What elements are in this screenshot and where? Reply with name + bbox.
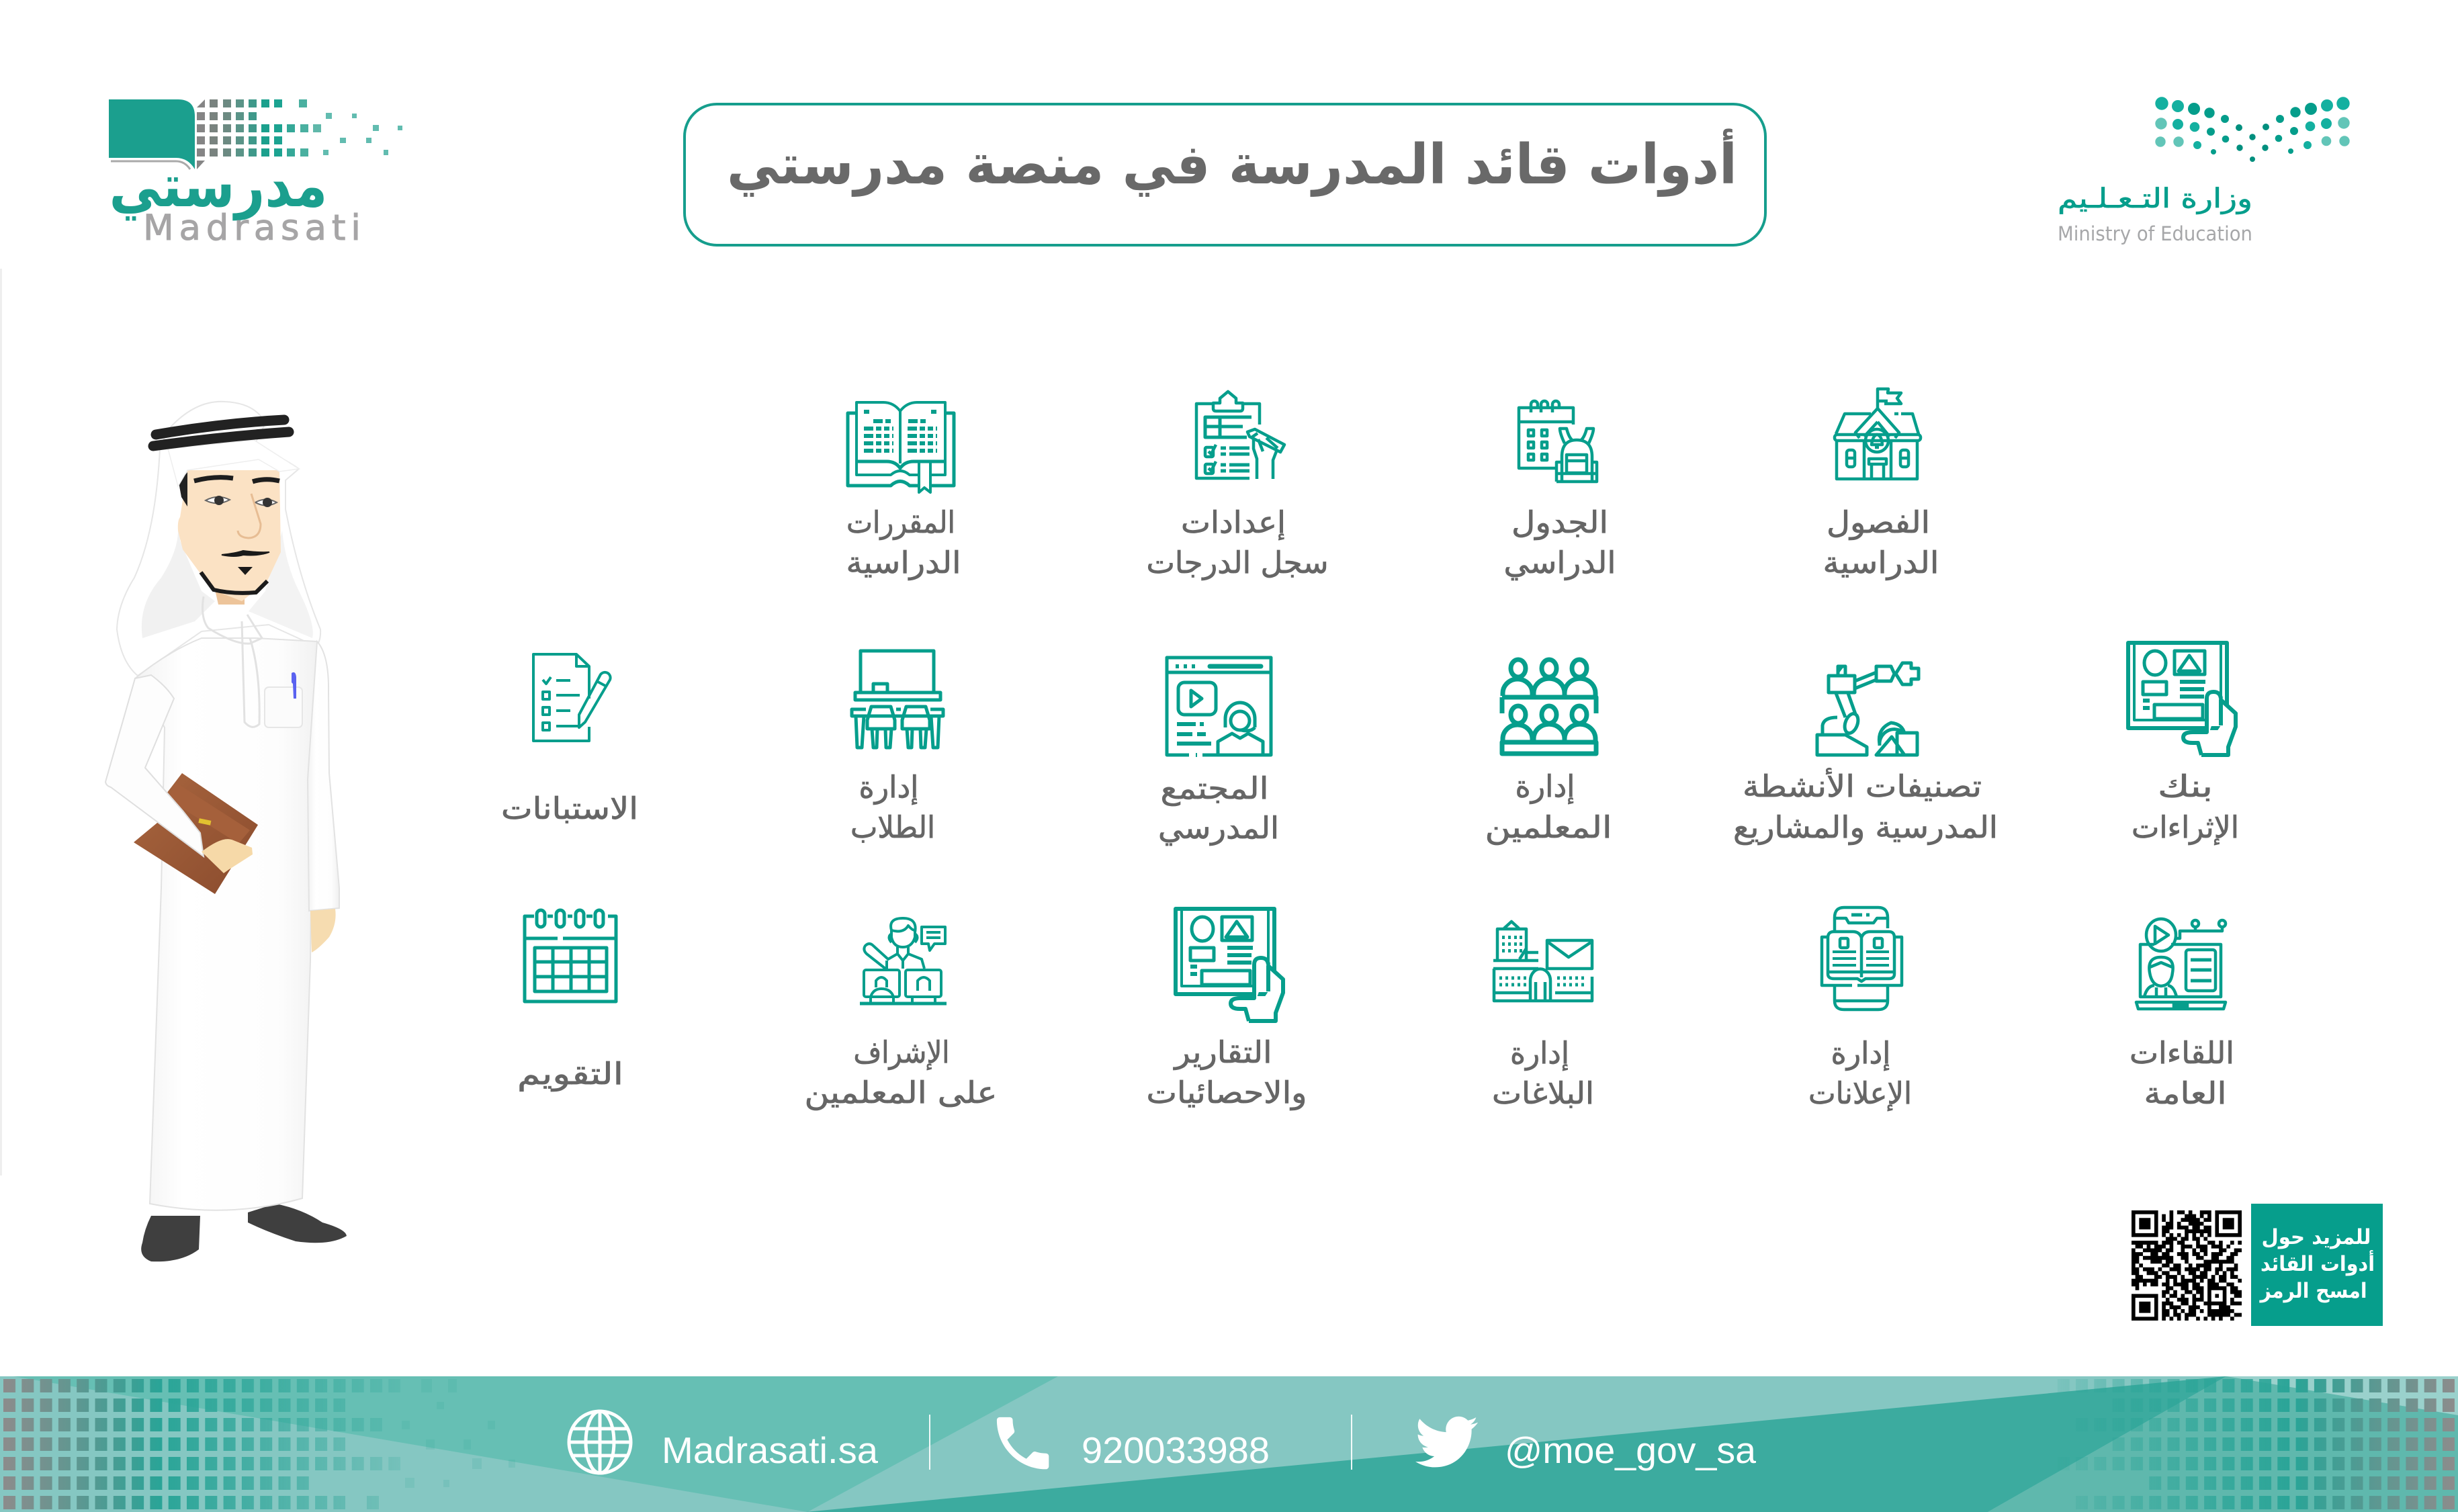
- icon: twitter: [1415, 1417, 1478, 1467]
- pocket: [265, 687, 302, 727]
- label: [1146, 504, 1329, 580]
- label: إدارة: [859, 769, 919, 805]
- panel text: للمزيد حول: [2261, 1225, 2371, 1249]
- label: الدراسية: [1823, 545, 1939, 580]
- QR code: [2132, 1210, 2242, 1321]
- face: [178, 470, 281, 601]
- label: إدارة: [1516, 768, 1575, 804]
- ghutra brim: [168, 440, 299, 486]
- pixel grid: [197, 99, 402, 169]
- label: الفصول: [1827, 504, 1930, 540]
- briefcase: [134, 773, 258, 894]
- label: [1158, 770, 1279, 846]
- label: [850, 769, 935, 845]
- tool: بنك الإثراءات: [2128, 643, 2239, 845]
- icon: online meeting: [2136, 919, 2226, 1009]
- label: [1146, 1034, 1307, 1111]
- label: الدراسية: [846, 545, 961, 580]
- label: المعلمين: [1485, 809, 1612, 845]
- label: إدارة: [1510, 1035, 1569, 1071]
- tool: إدارة البلاغات: [1492, 922, 1594, 1111]
- title text: أدوات قائد المدرسة في منصة مدرستي: [727, 128, 1737, 197]
- icon: timetable and backpack: [1519, 401, 1597, 482]
- ministry name english: Ministry of Education: [2058, 222, 2252, 245]
- footer background shapes: [0, 1376, 2458, 1512]
- label: الإعلانات: [1808, 1075, 1912, 1111]
- tool: إدارة الطلاب: [850, 651, 943, 845]
- character: school leader: [105, 402, 347, 1261]
- website: Madrasati.sa: [662, 1429, 878, 1471]
- icon: calendar: [525, 910, 616, 1002]
- label: المدرسية والمشاريع: [1733, 809, 1998, 846]
- tool: الفصول الدراسية: [1823, 389, 1939, 580]
- tool: اللقاءات العامة: [2130, 919, 2234, 1111]
- QR call to action: [2132, 1204, 2383, 1326]
- label: الإشراف: [853, 1034, 950, 1070]
- title frame: [685, 104, 1765, 245]
- label: [1823, 504, 1939, 580]
- label: المقررات: [846, 504, 955, 540]
- icon: open book: [848, 402, 954, 492]
- label: [1808, 1035, 1912, 1111]
- footer band: [0, 1370, 2458, 1512]
- pen: [292, 672, 296, 699]
- title box: [685, 104, 1765, 245]
- icon: phone with open book: [1822, 907, 1902, 1010]
- separator: [1351, 1415, 1352, 1470]
- tool: إدارة الإعلانات: [1808, 907, 1912, 1111]
- wordmark latin: Madrasati: [143, 208, 361, 249]
- tool: تصنيفات الأنشطة المدرسية والمشاريع: [1733, 663, 1998, 846]
- label: [1492, 1035, 1594, 1111]
- tool: إدارة المعلمين: [1485, 660, 1612, 845]
- label: [1733, 767, 1998, 846]
- icon: group of teachers: [1502, 660, 1596, 754]
- tool: المقررات الدراسية: [846, 402, 961, 580]
- label: [2132, 768, 2239, 845]
- label: [1503, 504, 1616, 580]
- icon: phone: [997, 1417, 1049, 1469]
- icon: globe: [569, 1411, 631, 1473]
- label: التقويم: [517, 1056, 623, 1092]
- label: المجتمع: [1161, 770, 1268, 806]
- right hand: [310, 909, 336, 952]
- label: [1485, 768, 1612, 845]
- label: إدارة: [1831, 1035, 1890, 1071]
- icon: teacher supervising: [860, 918, 947, 1004]
- icon: building and envelope: [1493, 922, 1592, 1001]
- twitter handle: @moe_gov_sa: [1505, 1429, 1756, 1471]
- teal panel: [2251, 1204, 2383, 1326]
- pixel grid right: [2058, 1379, 2455, 1509]
- panel text: [2259, 1225, 2375, 1303]
- logo: Madrasati: [109, 99, 402, 249]
- sideburn: [179, 472, 187, 506]
- label: على المعلمين: [805, 1075, 997, 1110]
- icon: teal open book: [109, 99, 195, 169]
- ghutra: [117, 402, 320, 676]
- icon: school: [1835, 389, 1921, 479]
- phone number: 920033988: [1082, 1429, 1270, 1471]
- icon: tablet with hand: [2128, 643, 2236, 755]
- right sleeve: [308, 641, 339, 911]
- label: بنك: [2158, 768, 2213, 804]
- label: البلاغات: [1492, 1075, 1594, 1111]
- label: الإثراءات: [2132, 809, 2239, 845]
- panel text: أدوات القائد: [2261, 1250, 2375, 1276]
- tool: الإشراف على المعلمين: [805, 918, 997, 1110]
- label: الجدول: [1511, 504, 1608, 541]
- left hand: [202, 839, 253, 873]
- label: والاحصائيات: [1146, 1075, 1307, 1111]
- page edge line: [0, 269, 2, 1175]
- label: إعدادات: [1181, 504, 1286, 540]
- label: الاستبانات: [501, 791, 638, 826]
- logo: Ministry of Education: [2058, 97, 2350, 245]
- separator: [929, 1415, 930, 1470]
- label: اللقاءات: [2130, 1035, 2234, 1071]
- label: [2130, 1035, 2234, 1111]
- left arm: [105, 675, 204, 856]
- icon: palm dots: [2155, 97, 2350, 162]
- label: الطلاب: [850, 809, 935, 845]
- icon: video window with instructor: [1167, 658, 1271, 755]
- label: المدرسي: [1158, 810, 1279, 846]
- collar and placket: [203, 596, 262, 727]
- ministry name arabic: وزارة التـعـلـيم: [2058, 183, 2252, 214]
- tool: إعدادات سجل الدرجات: [1146, 392, 1329, 580]
- neck: [215, 590, 245, 605]
- label: [805, 1034, 997, 1110]
- pixel grid left: [3, 1379, 515, 1509]
- tool: التقويم: [517, 910, 623, 1092]
- panel text: امسح الرمز: [2259, 1279, 2367, 1303]
- label: تصنيفات الأنشطة: [1743, 767, 1982, 804]
- label: سجل الدرجات: [1146, 545, 1329, 580]
- wordmark arabic: مدرستي: [109, 151, 328, 221]
- icon: robot arm: [1817, 663, 1919, 755]
- tool: الجدول الدراسي: [1503, 401, 1616, 580]
- icon: clipboard and pencil: [1196, 392, 1284, 479]
- label: الدراسي: [1503, 545, 1616, 580]
- igal: [153, 420, 289, 446]
- thobe body: [135, 638, 326, 1210]
- icon: survey sheet and pencil: [533, 654, 611, 741]
- tool: المجتمع المدرسي: [1158, 658, 1279, 846]
- tool: الاستبانات: [501, 654, 638, 826]
- label: التقارير: [1173, 1034, 1272, 1070]
- label: [846, 504, 961, 580]
- icon: classroom board and desks: [852, 651, 943, 748]
- icon: tablet with hand: [1176, 909, 1283, 1021]
- facial features: [194, 478, 279, 593]
- label: العامة: [2144, 1075, 2226, 1111]
- shoes: [141, 1204, 347, 1261]
- tool: التقارير والاحصائيات: [1146, 909, 1307, 1111]
